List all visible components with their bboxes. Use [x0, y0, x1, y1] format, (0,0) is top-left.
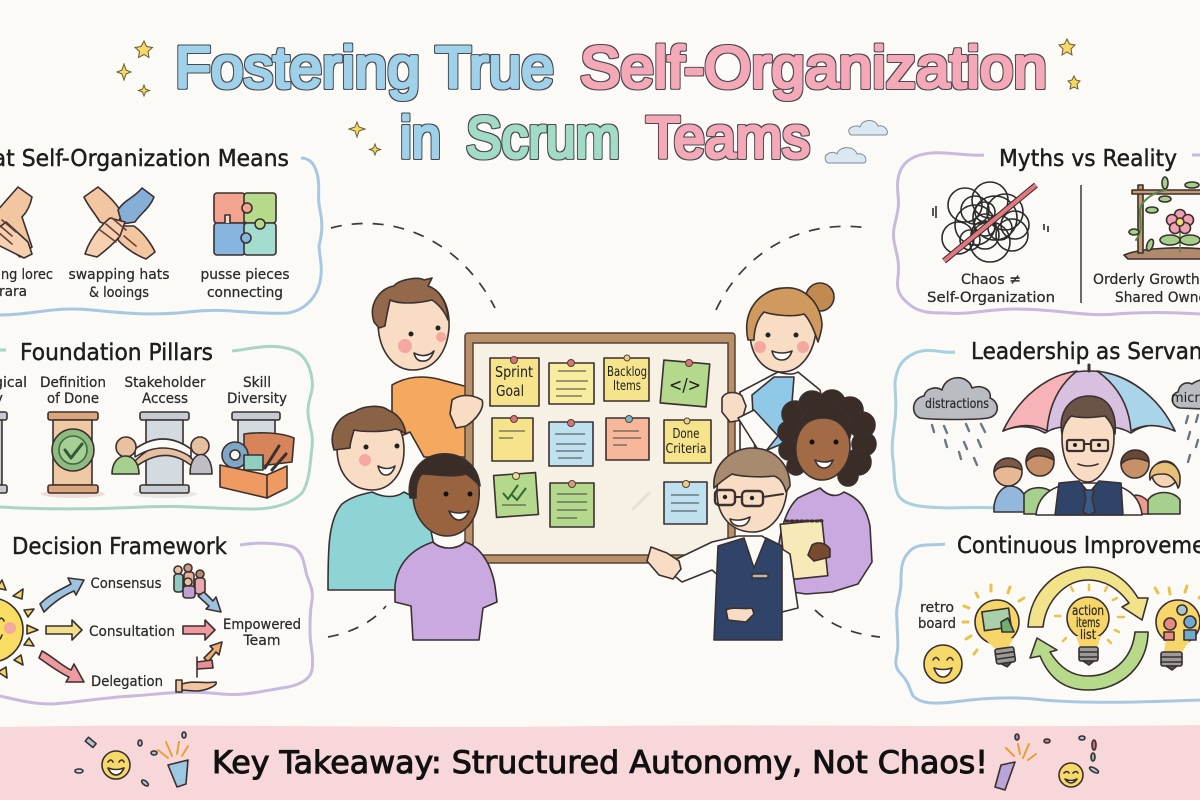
arrow: consensus to empowered	[198, 592, 221, 612]
note: sprint goal: Sprint	[495, 363, 533, 381]
label: self-organization: Self-Organization	[927, 290, 1055, 306]
icon: umbrella	[1003, 365, 1175, 433]
person: orange shirt	[372, 278, 468, 457]
arrow: to consultation	[46, 620, 82, 640]
panel: foundation pillars	[0, 340, 312, 509]
arrow: delegation to empowered	[204, 642, 222, 662]
icon: definition of done pillar	[41, 412, 105, 498]
title: Self-Organization	[580, 36, 1047, 100]
title	[175, 36, 1047, 170]
label: connecting: connecting	[207, 285, 283, 301]
label: skill: Skill	[243, 375, 271, 391]
note: done: Done	[672, 427, 700, 442]
icon: stacked hands middle	[84, 187, 155, 259]
icon: group of people	[174, 564, 205, 598]
title: in	[400, 106, 441, 170]
label: empowered: Empowered	[223, 617, 301, 633]
heading: Decision Framework	[12, 534, 228, 560]
label: chaos not equal: Chaos ≠	[961, 272, 1021, 288]
banner: key takeaway	[0, 725, 1200, 800]
icon: smiley retro	[924, 645, 962, 683]
person: servant leader with vest	[647, 448, 798, 640]
icon: servant leader	[1036, 396, 1142, 515]
hero: team around the board	[328, 278, 876, 640]
divider	[1080, 185, 1082, 303]
label: access: Access	[142, 391, 188, 407]
label: hands left: ng lorec	[1, 267, 53, 283]
icon: puzzle pieces	[214, 193, 276, 255]
icon: retro board bulb	[975, 600, 1019, 668]
label: definition: Definition	[40, 375, 106, 391]
label: team: Team	[243, 633, 280, 649]
note: code: </>	[669, 375, 701, 396]
panel: myths vs reality	[893, 146, 1200, 315]
icon: team idea bulb	[1156, 600, 1200, 670]
icon: distractions cloud	[914, 378, 997, 465]
arrow: yellow cycle arc	[1028, 567, 1148, 627]
label: of done: of Done	[47, 391, 99, 407]
person: curly-haired woman	[777, 390, 876, 594]
icon: decorative stars and clouds	[117, 39, 1080, 163]
label: items: items	[1076, 616, 1100, 631]
icon: action items bulb	[1067, 597, 1109, 665]
title: Fostering True	[175, 36, 554, 100]
icon: stacked hands left	[0, 187, 32, 258]
label: swapping hats: swapping hats	[68, 267, 170, 283]
icon: right party popper	[995, 734, 1099, 790]
icon: right smiley	[1059, 763, 1083, 787]
corkboard	[465, 333, 735, 563]
label: puzzle pieces: pusse pieces	[200, 267, 290, 283]
panel: decision framework	[0, 534, 313, 704]
arrow: green cycle arc	[1030, 632, 1148, 690]
label: delegation: Delegation	[91, 674, 163, 690]
icon: chaos scribble	[933, 182, 1048, 262]
icon: left pillar	[0, 412, 7, 493]
label: action: action	[1072, 604, 1104, 619]
label: & roles: & looings	[89, 285, 149, 301]
icon: skill diversity toolbox pillar	[220, 412, 294, 498]
icon: sun	[0, 580, 38, 678]
note: criteria: Criteria	[666, 442, 706, 457]
icon: stakeholder bridge pillar	[112, 412, 212, 498]
arrow: consultation to empowered	[183, 620, 215, 640]
icon: rays on center bulb	[1055, 585, 1124, 643]
label: consultation: Consultation	[89, 624, 175, 640]
label: consensus: Consensus	[90, 576, 162, 592]
icon: left smiley	[102, 751, 130, 779]
person: teal shirt	[328, 406, 434, 590]
hero: dashed connector arcs	[328, 223, 880, 637]
icon: rays on first bulb	[963, 585, 1024, 654]
icon: team under umbrella	[994, 448, 1180, 514]
panel: continuous improvement	[896, 533, 1200, 703]
icon: micromanagement cloud	[1172, 379, 1200, 462]
arrow: to delegation	[39, 651, 84, 682]
label: retro: retro	[920, 600, 954, 616]
panel: what self-organization means	[0, 146, 322, 315]
icon: rays on third bulb	[1155, 586, 1200, 598]
note: backlog: Backlog	[607, 365, 647, 380]
person: purple shirt	[395, 454, 497, 640]
label: list: list	[1080, 628, 1096, 643]
icon: trellis with flower	[1124, 177, 1200, 259]
note: items: Items	[613, 379, 641, 394]
label: distractions: distractions	[925, 397, 989, 412]
icon: flag in hand	[176, 657, 216, 692]
person: woman in white coat	[722, 283, 834, 470]
icon: left party popper	[75, 732, 188, 787]
heading: Myths vs Reality	[999, 146, 1177, 172]
heading: Foundation Pillars	[20, 340, 213, 366]
hand: orange shirt on board	[450, 396, 483, 428]
title: Teams	[646, 106, 810, 170]
title: Scrum	[466, 106, 620, 170]
label: diversity: Diversity	[227, 391, 287, 407]
label: board: board	[918, 616, 956, 632]
banner text: Key Takeaway: Structured Autonomy, Not Chaos!	[212, 745, 988, 781]
label: stakeholder: Stakeholder	[124, 375, 206, 391]
arrow: to consensus	[40, 578, 84, 612]
panel: leadership as servant	[892, 339, 1200, 515]
note: goal: Goal	[496, 382, 524, 400]
